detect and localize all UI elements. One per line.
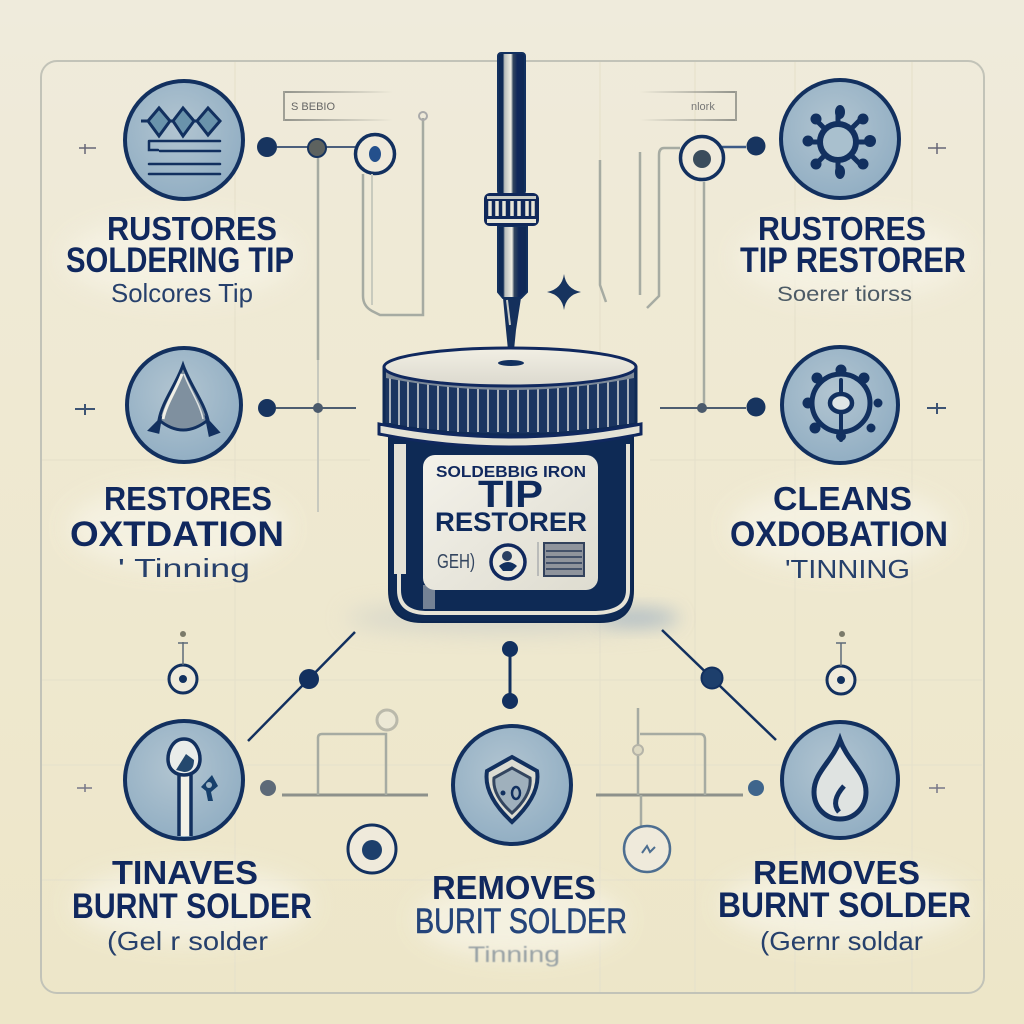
icon: gear sun [781, 80, 899, 198]
caption: (Gel r solder [107, 926, 268, 956]
jar [379, 348, 641, 622]
caption: Soerer tiorss [777, 283, 912, 306]
heading: REMOVES [753, 854, 920, 891]
icon: swab [125, 721, 243, 839]
connector: top left: S BEBIO [291, 101, 335, 113]
small marker [929, 784, 945, 793]
icon: sparkle [547, 274, 581, 310]
heading: REMOVES [432, 869, 596, 906]
jar shadow [345, 604, 680, 632]
heading line two: OXTDATION [70, 515, 284, 554]
caption: (Gernr soldar [760, 926, 923, 956]
connector: center vertical [502, 641, 518, 709]
icon: water drop [782, 722, 898, 838]
small marker: bottom left [77, 784, 92, 792]
caption: 'TINNING [785, 554, 910, 584]
jar label: TIP [478, 474, 543, 516]
connector: bottom right diagonal [662, 630, 855, 740]
heading: CLEANS [773, 480, 912, 517]
panel: bottom center benefit [415, 726, 627, 967]
panel: top left benefit [66, 81, 294, 308]
panel: middle right benefit [730, 347, 948, 584]
jar label: GEH) [437, 551, 475, 573]
jar label: RESTORER [435, 507, 587, 537]
jar label [423, 455, 598, 590]
jar lid [379, 348, 641, 447]
heading: RUSTORES [758, 210, 926, 247]
jar body [389, 436, 633, 622]
connector: center to bottom right [596, 708, 764, 872]
heading: TINAVES [112, 854, 258, 891]
heading: RUSTORES [107, 210, 277, 247]
heading line two: BURIT SOLDER [415, 902, 627, 941]
soldering iron [484, 53, 539, 366]
heading line two: BURNT SOLDER [718, 886, 971, 925]
icon: droplet [127, 348, 241, 462]
heading line two: TIP RESTORER [740, 241, 966, 280]
connector: middle right [660, 398, 946, 416]
connector: bottom left to center [260, 710, 428, 873]
heading line two: OXDOBATION [730, 515, 948, 554]
caption: Tinning [468, 942, 560, 967]
heading: RESTORES [104, 480, 272, 517]
panel: middle left benefit [70, 348, 284, 583]
caption: Solcores Tip [111, 278, 253, 308]
panel: bottom left benefit [72, 721, 312, 956]
caption: ' Tinning [118, 553, 250, 583]
panel: top right benefit [740, 80, 966, 306]
icon: target gear [782, 347, 898, 463]
icon: shield nut [453, 726, 571, 844]
connector: bottom left diagonal [169, 631, 355, 741]
heading line two: BURNT SOLDER [72, 887, 312, 926]
connector: top left [79, 91, 427, 1000]
connector: top right [600, 91, 946, 408]
icon: gems and lines [125, 81, 243, 199]
panel: bottom right benefit [718, 722, 971, 956]
heading line two: SOLDERING TIP [66, 241, 294, 280]
jar label: SOLDEBBIG IRON [436, 464, 586, 481]
connector: middle left [75, 360, 356, 512]
connector: top right: nlork [691, 101, 715, 113]
